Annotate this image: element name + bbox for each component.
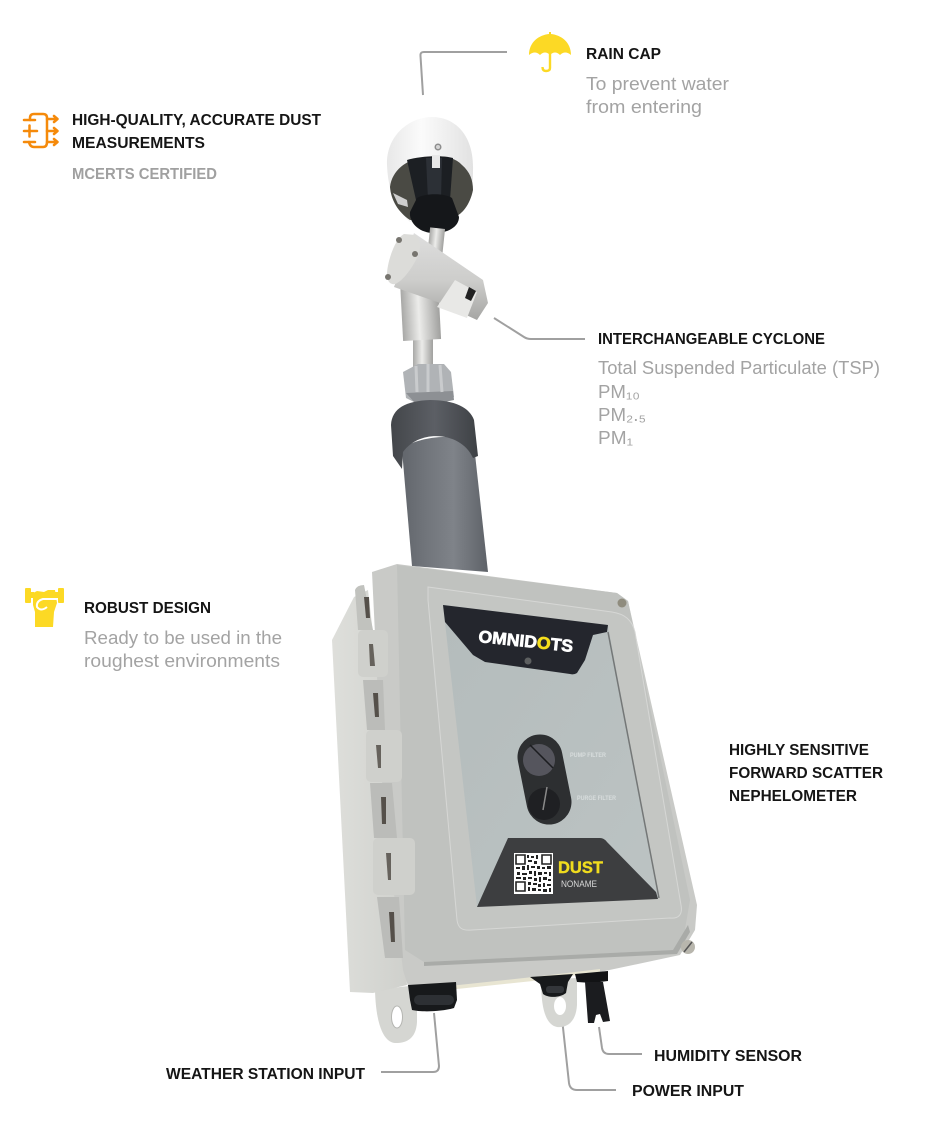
hinge knuckles <box>355 585 415 958</box>
heading: high-quality measurements: HIGH-QUALITY, ACCURATE DUST <box>72 112 321 129</box>
heading: nephelometer: HIGHLY SENSITIVE <box>729 742 869 759</box>
logo text: OMNIDOTS <box>478 627 574 656</box>
top screw <box>618 598 626 608</box>
product name: DUST <box>558 858 604 877</box>
filter labels: PUMP FILTER <box>570 753 607 759</box>
leader line: interchangeable cyclone <box>494 318 585 339</box>
text: rain cap description: from entering <box>586 97 702 117</box>
leader line: rain cap <box>420 52 507 95</box>
icon: robust fist with dumbbell <box>25 588 64 627</box>
heading: nephelometer: FORWARD SCATTER <box>729 765 883 782</box>
mounting tab right <box>541 978 577 1027</box>
leader line: humidity sensor <box>599 1027 642 1054</box>
front panel <box>443 605 658 907</box>
text: cyclone particulate options <box>598 358 880 448</box>
qr code <box>514 853 553 894</box>
lid shadow line <box>424 925 690 966</box>
text: rain cap description: To prevent water <box>586 74 729 94</box>
device: sensor mast <box>385 117 488 572</box>
mounting tab left <box>375 985 417 1043</box>
heading: rain cap: RAIN CAP <box>586 46 661 63</box>
heading: nephelometer: NEPHELOMETER <box>729 788 857 805</box>
grey tube <box>402 437 488 572</box>
lower steel tube <box>413 325 433 373</box>
text: mcerts certified: MCERTS CERTIFIED <box>72 166 217 183</box>
weather station connector <box>408 982 457 1011</box>
icon: rain umbrella <box>529 32 571 71</box>
compression fitting <box>403 364 454 403</box>
lid raised face <box>397 565 690 962</box>
filter labels: PURGE FILTER <box>577 796 617 802</box>
heading: robust design: ROBUST DESIGN <box>84 600 211 617</box>
text: cyclone particulate options: PM₁₀ <box>598 382 640 402</box>
text: cyclone particulate options: PM₂.₅ <box>598 405 646 425</box>
device name: NONAME <box>561 879 597 889</box>
filter knobs <box>523 744 560 820</box>
leader line: power input <box>560 1000 616 1090</box>
text: rain cap description <box>586 74 729 117</box>
corner screw <box>681 940 695 954</box>
heading: high-quality measurements <box>72 112 321 152</box>
body underside strip <box>440 969 600 989</box>
interchangeable cyclone <box>385 233 488 341</box>
stem between cap and cyclone <box>426 227 445 269</box>
logo band <box>443 605 608 674</box>
heading: interchangeable cyclone: INTERCHANGEABLE CYCLONE <box>598 331 825 348</box>
text: robust design description: roughest environments <box>84 651 280 671</box>
humidity connector <box>575 971 610 1023</box>
filter labels <box>570 753 617 802</box>
main body <box>372 564 697 988</box>
leader line: weather station input <box>381 1013 439 1072</box>
label: humidity sensor: HUMIDITY SENSOR <box>654 1048 802 1065</box>
rain cap dome <box>387 117 473 233</box>
label: power input: POWER INPUT <box>632 1083 744 1100</box>
text: cyclone particulate options: PM₁ <box>598 428 633 448</box>
device: enclosure <box>332 564 697 1043</box>
heading: nephelometer <box>729 742 883 805</box>
side door <box>332 590 407 993</box>
label: weather station input: WEATHER STATION INPUT <box>166 1066 365 1083</box>
icon: accurate measurements <box>24 114 58 147</box>
dark collar <box>391 400 478 469</box>
text: robust design description <box>84 628 282 671</box>
product band <box>477 838 658 907</box>
text: robust design description: Ready to be used in the <box>84 628 282 648</box>
heading: high-quality measurements: MEASUREMENTS <box>72 135 205 152</box>
power connector <box>530 974 573 997</box>
text: cyclone particulate options: Total Suspended Particulate (TSP) <box>598 358 880 378</box>
lid frame <box>428 587 681 930</box>
